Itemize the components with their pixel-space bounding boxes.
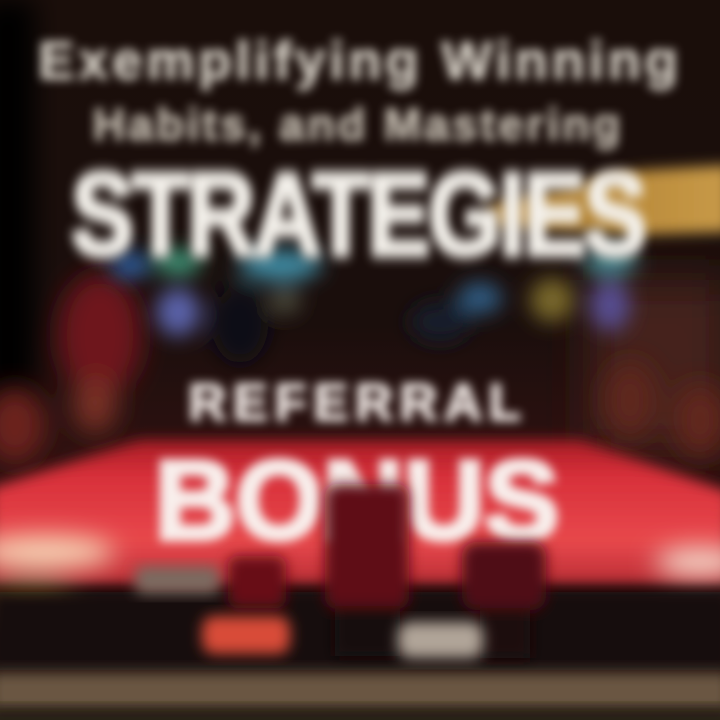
left dark column xyxy=(0,0,35,400)
white pill button xyxy=(398,622,483,658)
right audience figures xyxy=(604,362,720,456)
heading: referral: REFERRAL xyxy=(188,374,528,432)
table highlights xyxy=(0,536,720,620)
title line 1: Exemplifying Winning xyxy=(38,31,682,91)
coloured blobs under strategies xyxy=(110,249,638,363)
highlight left of chair xyxy=(135,566,220,594)
title line 2: Habits, and Mastering xyxy=(93,99,623,150)
heading: strategies: STRATEGIES xyxy=(71,149,645,280)
red table xyxy=(0,440,720,585)
lower dark floor xyxy=(0,592,720,670)
centre chair xyxy=(325,484,409,656)
gold light strip xyxy=(490,165,720,235)
left red figure xyxy=(0,273,142,463)
heading: bonus: BONUS xyxy=(155,438,559,563)
right chair xyxy=(462,542,546,658)
right warm audience xyxy=(590,280,720,450)
tan bottom band xyxy=(0,672,720,712)
left chair xyxy=(228,556,286,608)
red pill button xyxy=(202,616,290,654)
